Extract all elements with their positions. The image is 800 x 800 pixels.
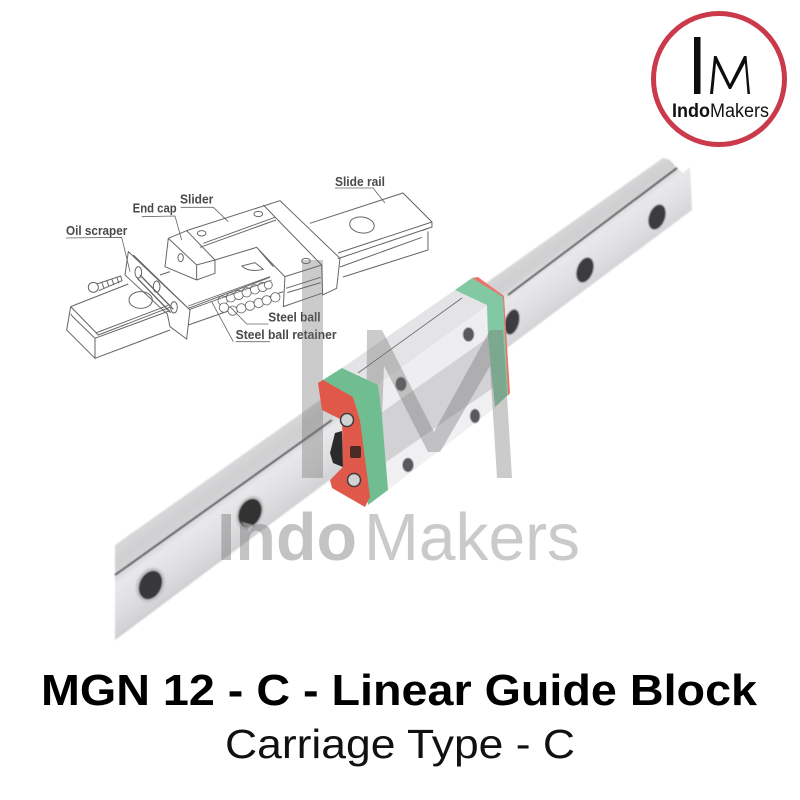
- carriage top surface: [342, 290, 490, 385]
- logo red ring: [654, 14, 784, 144]
- carriage mounting holes: [396, 328, 480, 472]
- exploded parts diagram: [66, 175, 432, 358]
- lower cap screw: [348, 474, 360, 486]
- IndoMakers logo badge: [654, 14, 784, 144]
- carriage block: [342, 277, 510, 490]
- logo letter I: [694, 37, 700, 94]
- carriage lower side band: [385, 388, 496, 490]
- rail upper surface: [115, 158, 677, 575]
- label: End cap: End cap: [133, 202, 177, 216]
- watermark wordmark: [217, 500, 580, 575]
- diagram: slider body: [165, 201, 340, 307]
- watermark logo letters: [302, 260, 512, 478]
- linear guide rail: [115, 158, 692, 640]
- watermark text: Makers: Makers: [364, 500, 580, 575]
- front red end cap: [318, 380, 370, 507]
- watermark letter M: [366, 330, 512, 478]
- rear red end cap stripe: [472, 277, 510, 396]
- label: Oil scraper: Oil scraper: [66, 224, 127, 238]
- label: Slider: Slider: [180, 192, 213, 206]
- logo wordmark: IndoMakers: [672, 101, 769, 122]
- grease port: [350, 446, 361, 458]
- watermark text: Indo: Indo: [217, 500, 357, 575]
- rail groove: [115, 168, 677, 575]
- carriage upper side band: [378, 305, 489, 413]
- subtitle: Carriage Type - C: [225, 721, 575, 767]
- carriage middle side band: [381, 337, 493, 463]
- upper cap screw: [340, 414, 354, 426]
- rail mounting holes: [130, 202, 669, 607]
- title: MGN 12 - C - Linear Guide Block: [41, 666, 758, 715]
- diagram: steel balls: [188, 277, 280, 315]
- rail front face: [115, 167, 692, 640]
- label: Steel ball: Steel ball: [268, 310, 321, 324]
- diagram: leader lines: [66, 188, 385, 342]
- dark bearing opening: [330, 431, 343, 467]
- rear green end cap band: [455, 278, 508, 407]
- front end cap assembly: [318, 368, 388, 507]
- diagram: slide rail outline: [67, 193, 432, 358]
- front green end cap: [318, 368, 388, 505]
- label: Steel ball retainer: Steel ball retainer: [236, 328, 337, 342]
- logo letter M: [710, 56, 750, 94]
- label: Slide rail: Slide rail: [335, 175, 385, 189]
- watermark letter I: [302, 260, 323, 478]
- carriage top seam: [358, 298, 462, 373]
- diagram: oil scraper plate and screw: [88, 252, 190, 339]
